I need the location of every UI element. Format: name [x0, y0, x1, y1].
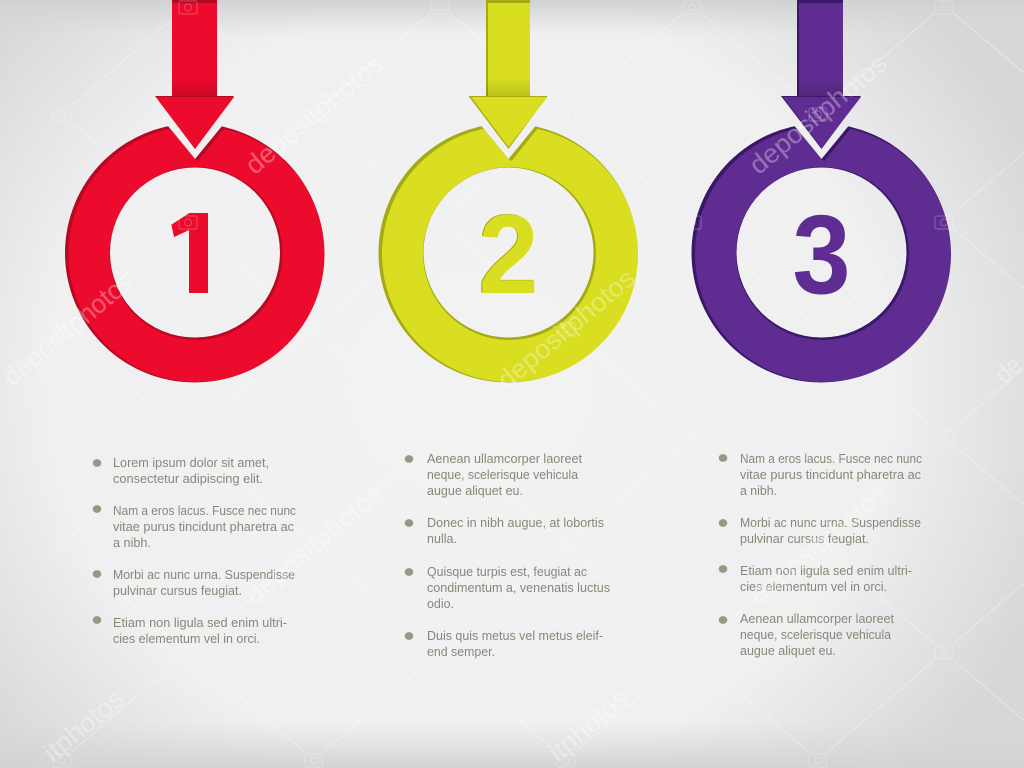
watermark overlay: depositphotos: [491, 263, 641, 395]
bullet list item 2.1: neque, scelerisque vehicula: [427, 467, 579, 482]
text column 3: [719, 451, 922, 658]
bullet list item 1.3: Morbi ac nunc urna. Suspendisse: [113, 567, 295, 582]
bullet list item 3.1: a nibh.: [740, 483, 777, 498]
bullet list item 2.3: condimentum a, venenatis luctus: [427, 580, 610, 595]
watermark overlay: depositphotos: [239, 48, 389, 180]
bullet list item 1.4: cies elementum vel in orci.: [113, 631, 260, 646]
bullet list item 3.2: pulvinar cursus feugiat.: [740, 531, 869, 546]
watermark overlay: depositphotos: [743, 478, 893, 610]
number 3: 3: [792, 192, 850, 317]
watermark overlay: itphotos: [543, 684, 635, 768]
bullet list item 1.1: [93, 455, 269, 486]
bullet list item 3.2: [719, 515, 921, 546]
number 2: 2: [478, 192, 538, 316]
bullet list item 1.2: [93, 503, 296, 550]
bullet list item 3.2: Morbi ac nunc urna. Suspendisse: [740, 515, 921, 530]
bullet list item 2.4: [405, 628, 603, 659]
watermark overlay: depositphotos: [239, 478, 389, 610]
arrow 2: [468, 0, 548, 149]
bullet list item 3.4: neque, scelerisque vehicula: [740, 627, 892, 642]
ring 2: [378, 123, 638, 382]
bullet list item 2.2: Donec in nibh augue, at lobortis: [427, 515, 604, 530]
watermark overlay: itphotos: [38, 684, 130, 768]
bullet list item 1.2: a nibh.: [113, 535, 151, 550]
bullet list item 3.3: Etiam non ligula sed enim ultri-: [740, 563, 912, 578]
bullet list item 2.2: nulla.: [427, 531, 457, 546]
ring 3: [692, 123, 951, 382]
ring 1: [65, 123, 324, 382]
bullet list item 3.1: vitae purus tincidunt pharetra ac: [740, 467, 921, 482]
bullet list item 1.1: Lorem ipsum dolor sit amet,: [113, 455, 269, 470]
bullet list item 3.4: [719, 611, 894, 658]
watermark overlay: depositphotos: [0, 266, 139, 392]
bullet list item 3.4: augue aliquet eu.: [740, 643, 836, 658]
bullet list item 2.1: Aenean ullamcorper laoreet: [427, 451, 582, 466]
bullet list item 3.1: Nam a eros lacus. Fusce nec nunc: [740, 451, 922, 466]
bullet list item 3.3: cies elementum vel in orci.: [740, 579, 887, 594]
bullet list item 1.2: vitae purus tincidunt pharetra ac: [113, 519, 294, 534]
bullet list item 2.3: [405, 564, 610, 611]
bullet list item 1.1: consectetur adipiscing elit.: [113, 471, 263, 486]
number 2: 2: [478, 192, 538, 317]
bullet list item 2.3: Quisque turpis est, feugiat ac: [427, 564, 587, 579]
bullet list item 2.1: [405, 451, 582, 498]
arrow 3: [781, 0, 861, 149]
bullet list item 2.3: odio.: [427, 596, 454, 611]
arrow 1: [155, 0, 234, 149]
bullet list item 2.4: end semper.: [427, 644, 495, 659]
bullet list item 2.1: augue aliquet eu.: [427, 483, 523, 498]
bullet list item 3.4: Aenean ullamcorper laoreet: [740, 611, 894, 626]
bullet list item 1.3: pulvinar cursus feugiat.: [113, 583, 242, 598]
bullet list item 2.4: Duis quis metus vel metus eleif-: [427, 628, 603, 643]
bullet list item 1.3: [93, 567, 295, 598]
bullet list item 3.1: [719, 451, 922, 498]
watermark overlay: depositphotos: [743, 48, 893, 180]
bullet list item 1.4: Etiam non ligula sed enim ultri-: [113, 615, 287, 630]
number 1: 1: [166, 192, 229, 317]
text column 2: [405, 451, 610, 659]
bullet list item 1.4: [93, 615, 287, 646]
bullet list item 2.2: [405, 515, 604, 546]
bullet list item 1.2: Nam a eros lacus. Fusce nec nunc: [113, 503, 296, 518]
step 1: red ring and arrow: [65, 0, 324, 382]
bullet list item 3.3: [719, 563, 912, 594]
text column 1: [93, 455, 296, 646]
step 3: purple ring and arrow: [692, 0, 951, 382]
step 2: yellow ring and arrow: [378, 0, 638, 382]
